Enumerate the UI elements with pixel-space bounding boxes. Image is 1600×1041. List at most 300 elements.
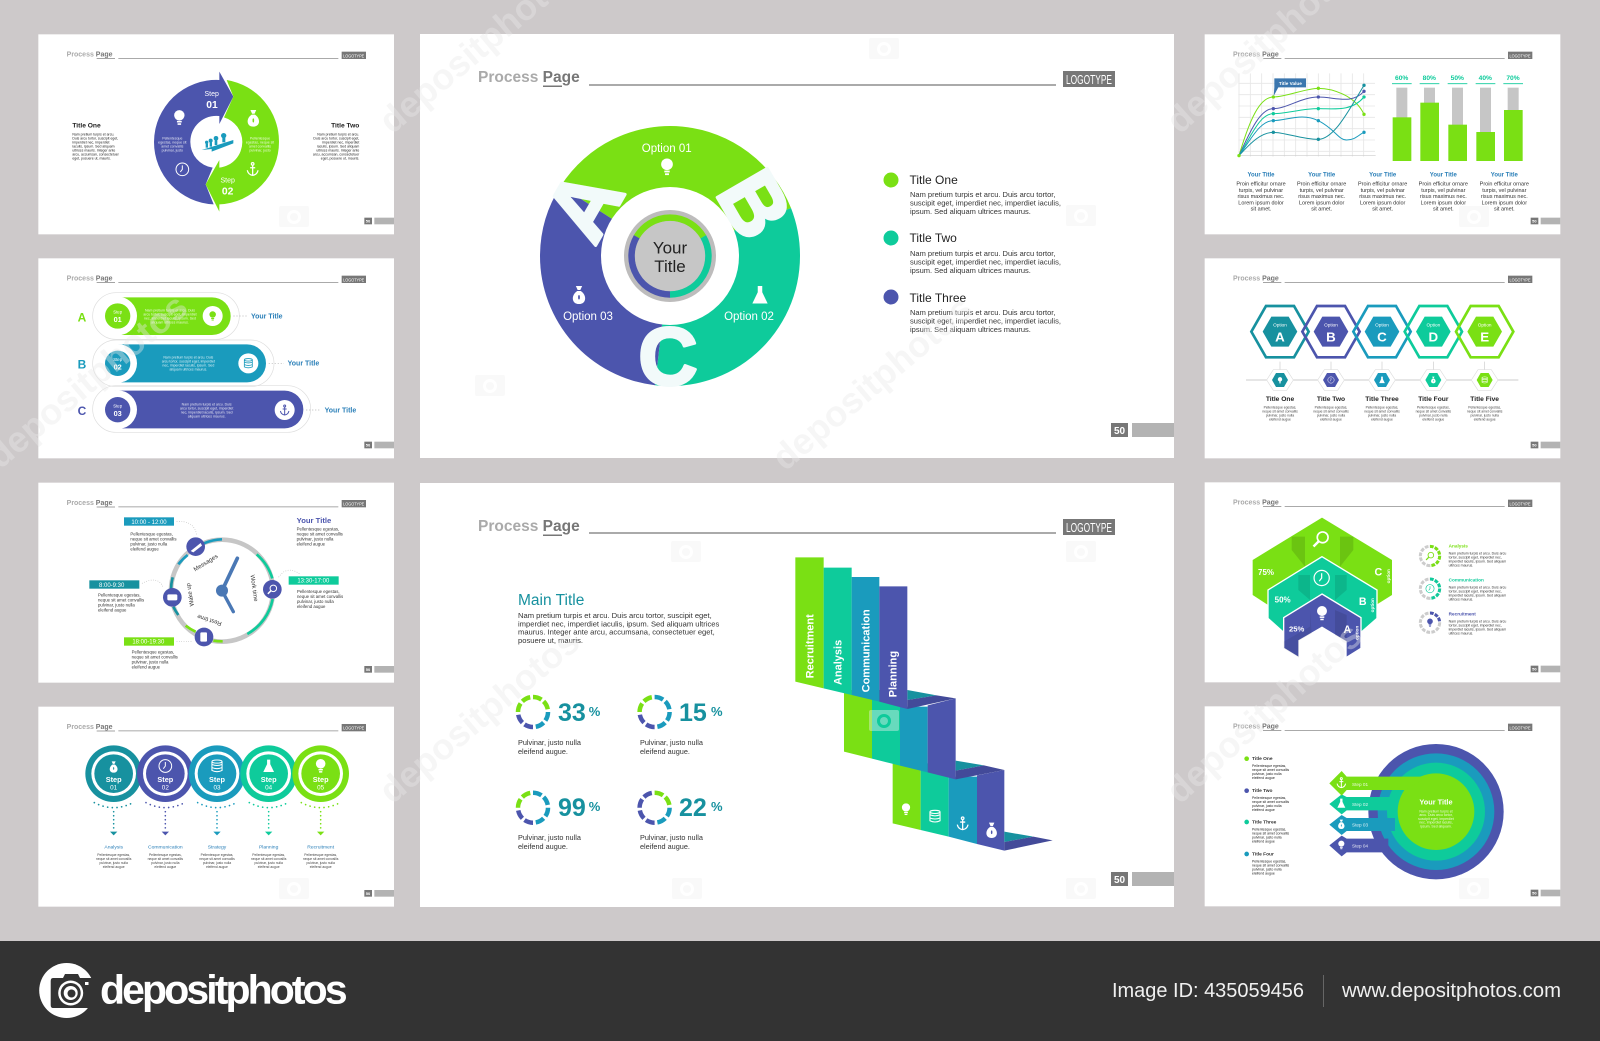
step captions: neque sit amet convallis [251, 857, 287, 861]
step captions: Pellentesque egestas, [304, 853, 337, 857]
middle band [844, 690, 1004, 779]
icon: money bag [248, 110, 259, 127]
slide header [478, 69, 1115, 87]
icon: bulb [174, 110, 185, 125]
list: title two: eleifend augue [1252, 808, 1275, 812]
list: title four [1244, 851, 1289, 875]
slide header [1233, 724, 1532, 731]
bar chart: 60% [1395, 75, 1408, 82]
chevron A: A [1343, 624, 1351, 636]
slide header: LOGOTYPE [1509, 277, 1531, 283]
list: title two: Pellentesque egestas, [1252, 796, 1286, 800]
page number [1531, 442, 1560, 448]
step captions: Analysis [104, 845, 123, 851]
list: title one [1244, 756, 1289, 780]
cycle diagram: 01 [206, 100, 218, 111]
step 01 arrow: Step 01 [1352, 782, 1368, 787]
cycle diagram: amet convallis [161, 144, 184, 148]
legend: title one: ipsum. Sed aliquam ultrices maurus. [910, 207, 1031, 216]
hexagon captions: Title Two [1317, 396, 1345, 403]
clock ring: Messages [193, 554, 219, 573]
camera watermarks [279, 38, 1489, 899]
slide header [67, 500, 366, 508]
text: main title: posuere ut, mauris. [518, 636, 583, 645]
pill B: B [78, 357, 87, 371]
chevron C [1253, 518, 1392, 606]
label: 18:00-19:30: Pellentesque egestas, [132, 649, 174, 654]
step captions: Strategy [208, 845, 227, 851]
hexagon captions: neque sit amet convallis [1416, 410, 1451, 414]
stat: 15%: % [711, 704, 723, 719]
text: title one: ultrices mauris. Integer ante [72, 148, 115, 152]
chevron B: B [1359, 596, 1367, 608]
step 01: 01 [110, 784, 118, 791]
pill A: Your Title [251, 314, 283, 321]
legend: title three: ipsum. Sed aliquam ultrices maurus. [910, 325, 1031, 334]
chart captions: sit amet. [1251, 207, 1272, 213]
step 05: Step [313, 775, 329, 784]
page number: 50 [366, 219, 371, 224]
hexagon captions: pulvinar, justo nulla [1471, 414, 1499, 418]
legend: title three [884, 290, 1061, 334]
legend: recruitment: imperdiet iaculis, ipsum. Sed aliquam [1449, 628, 1506, 632]
label: 18:00-19:30 [124, 637, 193, 669]
pill C [78, 386, 356, 432]
text: main title: maurus. Integer ante arcu, accumsana, consectetuer eget, [518, 628, 715, 637]
text: your title [297, 516, 343, 547]
slide header: Process Page [478, 518, 580, 535]
list: title one: Title One [1252, 756, 1273, 762]
text: title one: eget, posuere ut, mauris. [72, 156, 111, 160]
slide header: LOGOTYPE [1509, 501, 1531, 507]
option D hexagon: Option [1426, 323, 1441, 328]
concentric circles: ipsum. Sed aliquam. [1420, 825, 1452, 829]
step 03: Step [209, 775, 225, 784]
option C hexagon [1353, 306, 1411, 357]
letter A: A [525, 152, 643, 257]
chart captions: Your Title [1491, 173, 1519, 179]
stat: 22%: % [711, 799, 723, 814]
stat: 33%: Pulvinar, justo nulla [518, 738, 582, 747]
concentric circles [1329, 744, 1504, 879]
icon: bulb [902, 803, 910, 815]
label: 8:00-9:30 [89, 580, 163, 613]
chevron A [1284, 594, 1361, 658]
slide header [67, 276, 366, 283]
chart captions: Your Title [1308, 173, 1336, 179]
option B hexagon [1302, 306, 1360, 357]
list: title two: Title Two [1252, 788, 1273, 794]
chart captions: sit amet. [1433, 207, 1454, 213]
center badge: Your [653, 238, 688, 258]
pill A: Nam pretium turpis et arcu. Duis [145, 309, 195, 313]
text: title one: imperdiet nec, imperdiet [72, 140, 110, 144]
pill B [78, 340, 319, 387]
footer logo: depositphotos [100, 966, 347, 1012]
cycle diagram: egestas, neque sit [158, 140, 186, 144]
text: main title [518, 592, 720, 645]
step captions [96, 845, 339, 869]
legend: title one [884, 172, 1061, 216]
pill C: arcu tortor, suscipit eget, imperdiet [180, 407, 233, 411]
pill C: nec, imperdiet iaculis, ipsum. Sed [181, 411, 233, 415]
chevron C: option [1386, 569, 1391, 583]
text: title two: eget, posuere ut, mauris. [321, 156, 359, 160]
hexagon captions: eleifend augue [1320, 418, 1342, 422]
clock hands [222, 558, 237, 612]
stat: 99%: eleifend augue. [518, 842, 568, 851]
text: main title: Main Title [518, 592, 584, 609]
chevron B [1268, 557, 1377, 632]
step 02 arrow [1329, 794, 1408, 814]
page number [1531, 666, 1560, 672]
cycle diagram: pulvinar, justo [249, 148, 271, 152]
slide header: LOGOTYPE [343, 502, 365, 508]
hexagon captions: eleifend augue [1474, 418, 1496, 422]
step captions: pulvinar, justo nulla [100, 861, 128, 865]
list: title three [1244, 819, 1289, 843]
option B hexagon: B [1326, 329, 1336, 344]
cycle diagram [154, 72, 279, 212]
label: 18:00-19:30: neque sit amet convallis [132, 654, 178, 659]
text: title two: iaculis, ipsum. Sed aliquam [317, 144, 359, 148]
step captions: Pellentesque egestas, [252, 853, 285, 857]
watermarks: depositphotos [371, 620, 587, 811]
chart captions: Lorem ipsum dolor [1299, 200, 1345, 206]
text: your title: pulvinar, justo nulla [297, 537, 334, 542]
legend: title one: Nam pretium turpis et arcu. Duis arcu tortor, [910, 190, 1055, 199]
slide header: LOGOTYPE [1066, 72, 1112, 87]
step 05: 05 [317, 784, 325, 791]
option A hexagon: A [1275, 329, 1285, 344]
label: 8:00-9:30: neque sit amet convallis [98, 598, 144, 603]
panel: slide 3 clock schedule [38, 483, 394, 683]
slide header [1233, 52, 1532, 59]
option A hexagon [1251, 306, 1309, 357]
chart captions: Your Title [1247, 173, 1275, 179]
slide header [478, 518, 1115, 536]
legend: recruitment: ultrices maurus. [1449, 631, 1473, 635]
chart captions: Proin efficitur ornare [1480, 182, 1529, 188]
panel: slide 1 arrows cycle [38, 34, 394, 234]
text: title one: Duis arcu tortor, suscipit eget, [72, 136, 118, 140]
cycle diagram: amet convallis [249, 144, 271, 148]
text: title two: arcu, accumsan, consectetuer [313, 152, 360, 156]
panel: slide 6 hexagon options [1205, 258, 1560, 458]
concentric circles: nec, imperdiet iaculis, [1419, 821, 1453, 825]
top band [795, 557, 907, 709]
hexagon captions: Pellentesque egestas, [1264, 406, 1296, 410]
top band: Planning [888, 651, 900, 697]
center badge [624, 210, 716, 302]
footer logo [39, 963, 347, 1018]
hexagon captions: pulvinar, justo nulla [1368, 414, 1396, 418]
chart captions: turpis, vel pulvinar [1482, 188, 1527, 194]
legend: title one: suscipit eget, imperdiet nec, imperdiet iaculis, [910, 198, 1061, 208]
step captions: pulvinar, justo nulla [307, 861, 335, 865]
hexagon captions: pulvinar, justo nulla [1419, 414, 1448, 418]
top band: Analysis [832, 640, 844, 685]
option E hexagon [1456, 306, 1513, 357]
line chart [1237, 73, 1376, 157]
pill C: aliquam ultrices maurus. [188, 415, 226, 419]
step captions: Planning [259, 845, 279, 851]
chart captions: risus maximus nec. [1481, 194, 1528, 200]
list: title two: neque sit amet convallis [1252, 800, 1289, 804]
pill B: 02 [114, 362, 122, 371]
cycle diagram: pulvinar, justo [162, 148, 183, 152]
chevron B: 50% [1275, 596, 1291, 605]
chart captions: Proin efficitur ornare [1236, 182, 1286, 188]
option E hexagon: Option [1478, 323, 1492, 328]
chart captions [1236, 173, 1529, 213]
text: title two: Nam pretium turpis et arcu. [317, 132, 359, 136]
slide header [67, 52, 366, 59]
page number: 50 [1532, 667, 1537, 672]
slide header: Process Page [67, 52, 113, 59]
text: your title: Pellentesque egestas, [297, 527, 339, 532]
icon: clock [176, 163, 189, 176]
page number [1111, 423, 1174, 437]
text: title two [313, 123, 360, 160]
step captions: eleifend augue [310, 865, 332, 869]
text: title two: Title Two [331, 123, 359, 130]
step captions: pulvinar, justo nulla [203, 861, 231, 865]
chart captions: Proin efficitur ornare [1297, 182, 1346, 188]
step 01: Step [106, 775, 122, 784]
label: 8:00-9:30: pulvinar, justo nulla [98, 603, 135, 608]
legend: analysis: imperdiet iaculis, ipsum. Sed aliquam [1449, 560, 1506, 564]
step 02: 02 [162, 784, 169, 791]
legend: title three: suscipit eget, imperdiet nec, imperdiet iaculis, [910, 316, 1061, 326]
legend: recruitment: Recruitment [1449, 612, 1476, 617]
legend: recruitment [1420, 612, 1506, 635]
step captions: pulvinar, justo nulla [151, 861, 180, 865]
clock ring: Work time [248, 574, 258, 603]
step 03 arrow: Step 03 [1352, 823, 1368, 828]
step captions: pulvinar, justo nulla [255, 861, 283, 865]
panel: slide 8 concentric circles [1205, 706, 1560, 906]
page number [364, 442, 394, 448]
cycle diagram: Step [204, 91, 219, 98]
option B hexagon: Option [1324, 323, 1338, 328]
list: title four: eleifend augue [1252, 871, 1275, 875]
step captions: eleifend augue [206, 865, 228, 869]
label: 10:00 - 12:00: 10:00 - 12:00 [131, 520, 167, 526]
hexagon captions: Title Three [1365, 396, 1399, 403]
staircase chart [795, 557, 1053, 851]
watermarks: depositphotos [1158, 615, 1370, 811]
label: 13:30-17:00: 13:30-17:00 [297, 579, 330, 585]
label: 10:00 - 12:00: Pellentesque egestas, [130, 531, 173, 536]
icon: money bag [573, 286, 585, 304]
step 04: Step [261, 775, 277, 784]
icon: bulb [661, 158, 673, 175]
donut chart: Option 02 [724, 311, 774, 323]
option C hexagon: C [1377, 329, 1387, 344]
step 03 [189, 745, 245, 835]
legend: communication: tortor, suscipit eget, imperdiet nec, [1449, 590, 1502, 594]
bar chart: 50% [1451, 75, 1464, 82]
website: www.depositphotos.com [1341, 980, 1561, 1002]
pill C: Step [113, 403, 123, 408]
clock ring: Wake up [186, 582, 196, 607]
concentric circles: Nam pretium turpis et [1419, 809, 1453, 813]
hexagon captions: pulvinar, justo nulla [1266, 414, 1294, 418]
label: 18:00-19:30: pulvinar, justo nulla [132, 659, 169, 664]
label: 10:00 - 12:00 [124, 517, 197, 551]
page number: 50 [1532, 443, 1537, 448]
legend: recruitment: tortor, suscipit eget, imperdiet nec, [1449, 624, 1502, 628]
pill A: 01 [114, 315, 122, 324]
hexagon captions: Title Four [1418, 396, 1449, 403]
step 04 arrow [1329, 836, 1388, 856]
pill B: Nam pretium turpis et arcu. Duis [163, 356, 214, 360]
concentric circles: arcu. Duis arcu tortor, [1419, 813, 1453, 817]
hexagon captions: neque sit amet convallis [1467, 410, 1503, 414]
pill C: 03 [114, 409, 122, 418]
cycle diagram: Pellentesque [250, 136, 270, 140]
step captions: Pellentesque egestas, [149, 853, 182, 857]
concentric circles: suscipit eget, imperdiet [1418, 817, 1454, 821]
top band: Recruitment [804, 614, 816, 678]
slide header: LOGOTYPE [343, 53, 365, 59]
text: title two: ultrices mauris. Integer ante [316, 148, 359, 152]
slide header: Process Page [1233, 724, 1279, 731]
hexagon captions: Title Five [1470, 396, 1499, 403]
legend: title three: Title Three [910, 291, 967, 305]
list: title two: pulvinar, justo nulla [1252, 804, 1282, 808]
step 04 arrow: Step 04 [1352, 843, 1368, 848]
step captions: Pellentesque egestas, [201, 853, 233, 857]
pill A: nec, imperdiet iaculis, ipsum. Sed [144, 317, 196, 321]
stat: 22%: 22 [679, 794, 707, 822]
concentric circles: Your Title [1419, 797, 1453, 806]
list: title four: pulvinar, justo nulla [1252, 867, 1282, 871]
chart captions: sit amet. [1494, 207, 1515, 213]
divider [1323, 975, 1324, 1007]
chart captions: turpis, vel pulvinar [1239, 188, 1283, 194]
slide header: LOGOTYPE [343, 277, 365, 283]
step 02 [137, 745, 194, 835]
option D hexagon [1405, 306, 1462, 357]
legend: analysis: tortor, suscipit eget, imperdiet nec, [1449, 556, 1502, 560]
option A hexagon: Option [1273, 323, 1287, 328]
stat: 99% [518, 793, 601, 851]
step captions: Communication [148, 845, 183, 851]
footer bar [0, 941, 1600, 1041]
text: title one: Title One [72, 123, 101, 130]
pill A [78, 293, 283, 339]
chart captions: risus maximus nec. [1359, 194, 1407, 200]
pill C: C [78, 404, 87, 418]
chart captions: Lorem ipsum dolor [1238, 200, 1284, 206]
label: 13:30-17:00: eleifend augue [297, 604, 326, 609]
chart captions: turpis, vel pulvinar [1361, 188, 1405, 194]
slide header: LOGOTYPE [1509, 53, 1531, 59]
chart captions: sit amet. [1311, 207, 1332, 213]
icon: flask [752, 286, 768, 304]
legend: title two [884, 230, 1061, 275]
legend: communication: Communication [1449, 578, 1484, 583]
step captions: eleifend augue [258, 865, 280, 869]
text: title one: iaculis, ipsum. Sed aliquam [72, 144, 115, 148]
stat: 22%: Pulvinar, justo nulla [640, 833, 704, 842]
stat: 15%: Pulvinar, justo nulla [640, 738, 704, 747]
step captions: Recruitment [307, 845, 335, 851]
hexagon captions: Pellentesque egestas, [1315, 406, 1347, 410]
label: 13:30-17:00: pulvinar, justo nulla [297, 599, 334, 604]
page number: 50 [1114, 875, 1125, 886]
step 04 [240, 745, 297, 835]
text: your title: eleifend augue [297, 542, 326, 547]
label: 10:00 - 12:00: pulvinar, justo nulla [130, 541, 168, 546]
page number [364, 666, 394, 673]
pill A: arcu tortor, suscipit eget, imperdiet [143, 313, 197, 317]
list: title one: eleifend augue [1252, 776, 1275, 780]
step 04: 04 [265, 784, 273, 791]
chart captions: Lorem ipsum dolor [1360, 200, 1406, 206]
hexagon captions: eleifend augue [1371, 418, 1393, 422]
center badge: Title [654, 257, 686, 276]
slide header [1233, 276, 1532, 283]
page number: 50 [1114, 426, 1125, 437]
cycle diagram: egestas, neque sit [246, 140, 274, 144]
pill C: Your Title [325, 407, 356, 414]
text: title two: imperdiet nec, imperdiet [322, 140, 359, 144]
chevron B: option [1370, 598, 1375, 612]
slide header: Process Page [1233, 500, 1279, 507]
slide header: Process Page [1233, 276, 1279, 283]
pill B: Your Title [288, 361, 319, 368]
clock ring: Rest time [196, 612, 223, 626]
chart captions: Lorem ipsum dolor [1482, 200, 1527, 206]
chart captions: Your Title [1430, 173, 1458, 179]
hexagon captions: neque sit amet convallis [1262, 410, 1298, 414]
page number: 50 [366, 443, 371, 448]
slide header: Process Page [67, 500, 113, 507]
list: title four: Title Four [1252, 851, 1274, 857]
label: 13:30-17:00: neque sit amet convallis [297, 594, 343, 599]
page number [1531, 218, 1560, 224]
list: title one: Pellentesque egestas, [1252, 764, 1286, 768]
text: title two: Duis arcu tortor, suscipit eget, [313, 136, 359, 140]
clock ring [163, 537, 282, 646]
label: 18:00-19:30: 18:00-19:30 [132, 640, 165, 646]
stat: 15% [640, 697, 723, 756]
text: title one [72, 123, 120, 160]
label: 8:00-9:30: 8:00-9:30 [99, 583, 125, 589]
chart captions: Your Title [1369, 173, 1397, 179]
step 05 [292, 745, 349, 835]
chart captions: risus maximus nec. [1420, 194, 1467, 200]
panel: slide 2 step pills [38, 258, 394, 458]
letter C: C [638, 312, 698, 402]
list: title one: neque sit amet convallis [1252, 768, 1289, 772]
pill B: arcu tortor, suscipit eget, imperdiet [162, 360, 215, 364]
chevron A: option [1354, 626, 1359, 640]
hexagon captions: Pellentesque egestas, [1366, 406, 1398, 410]
bar chart: 40% [1479, 75, 1492, 82]
panel: main slide staircase [420, 483, 1174, 907]
chevron A: 25% [1289, 624, 1305, 633]
list: title three: pulvinar, justo nulla [1252, 835, 1282, 839]
text: your title: neque sit amet convallis [297, 532, 343, 537]
legend: analysis: ultrices maurus. [1449, 563, 1473, 567]
chart captions: risus maximus nec. [1298, 194, 1346, 200]
pill B: nec, imperdiet iaculis, ipsum. Sed [162, 364, 214, 368]
legend: analysis: Analysis [1449, 544, 1468, 549]
